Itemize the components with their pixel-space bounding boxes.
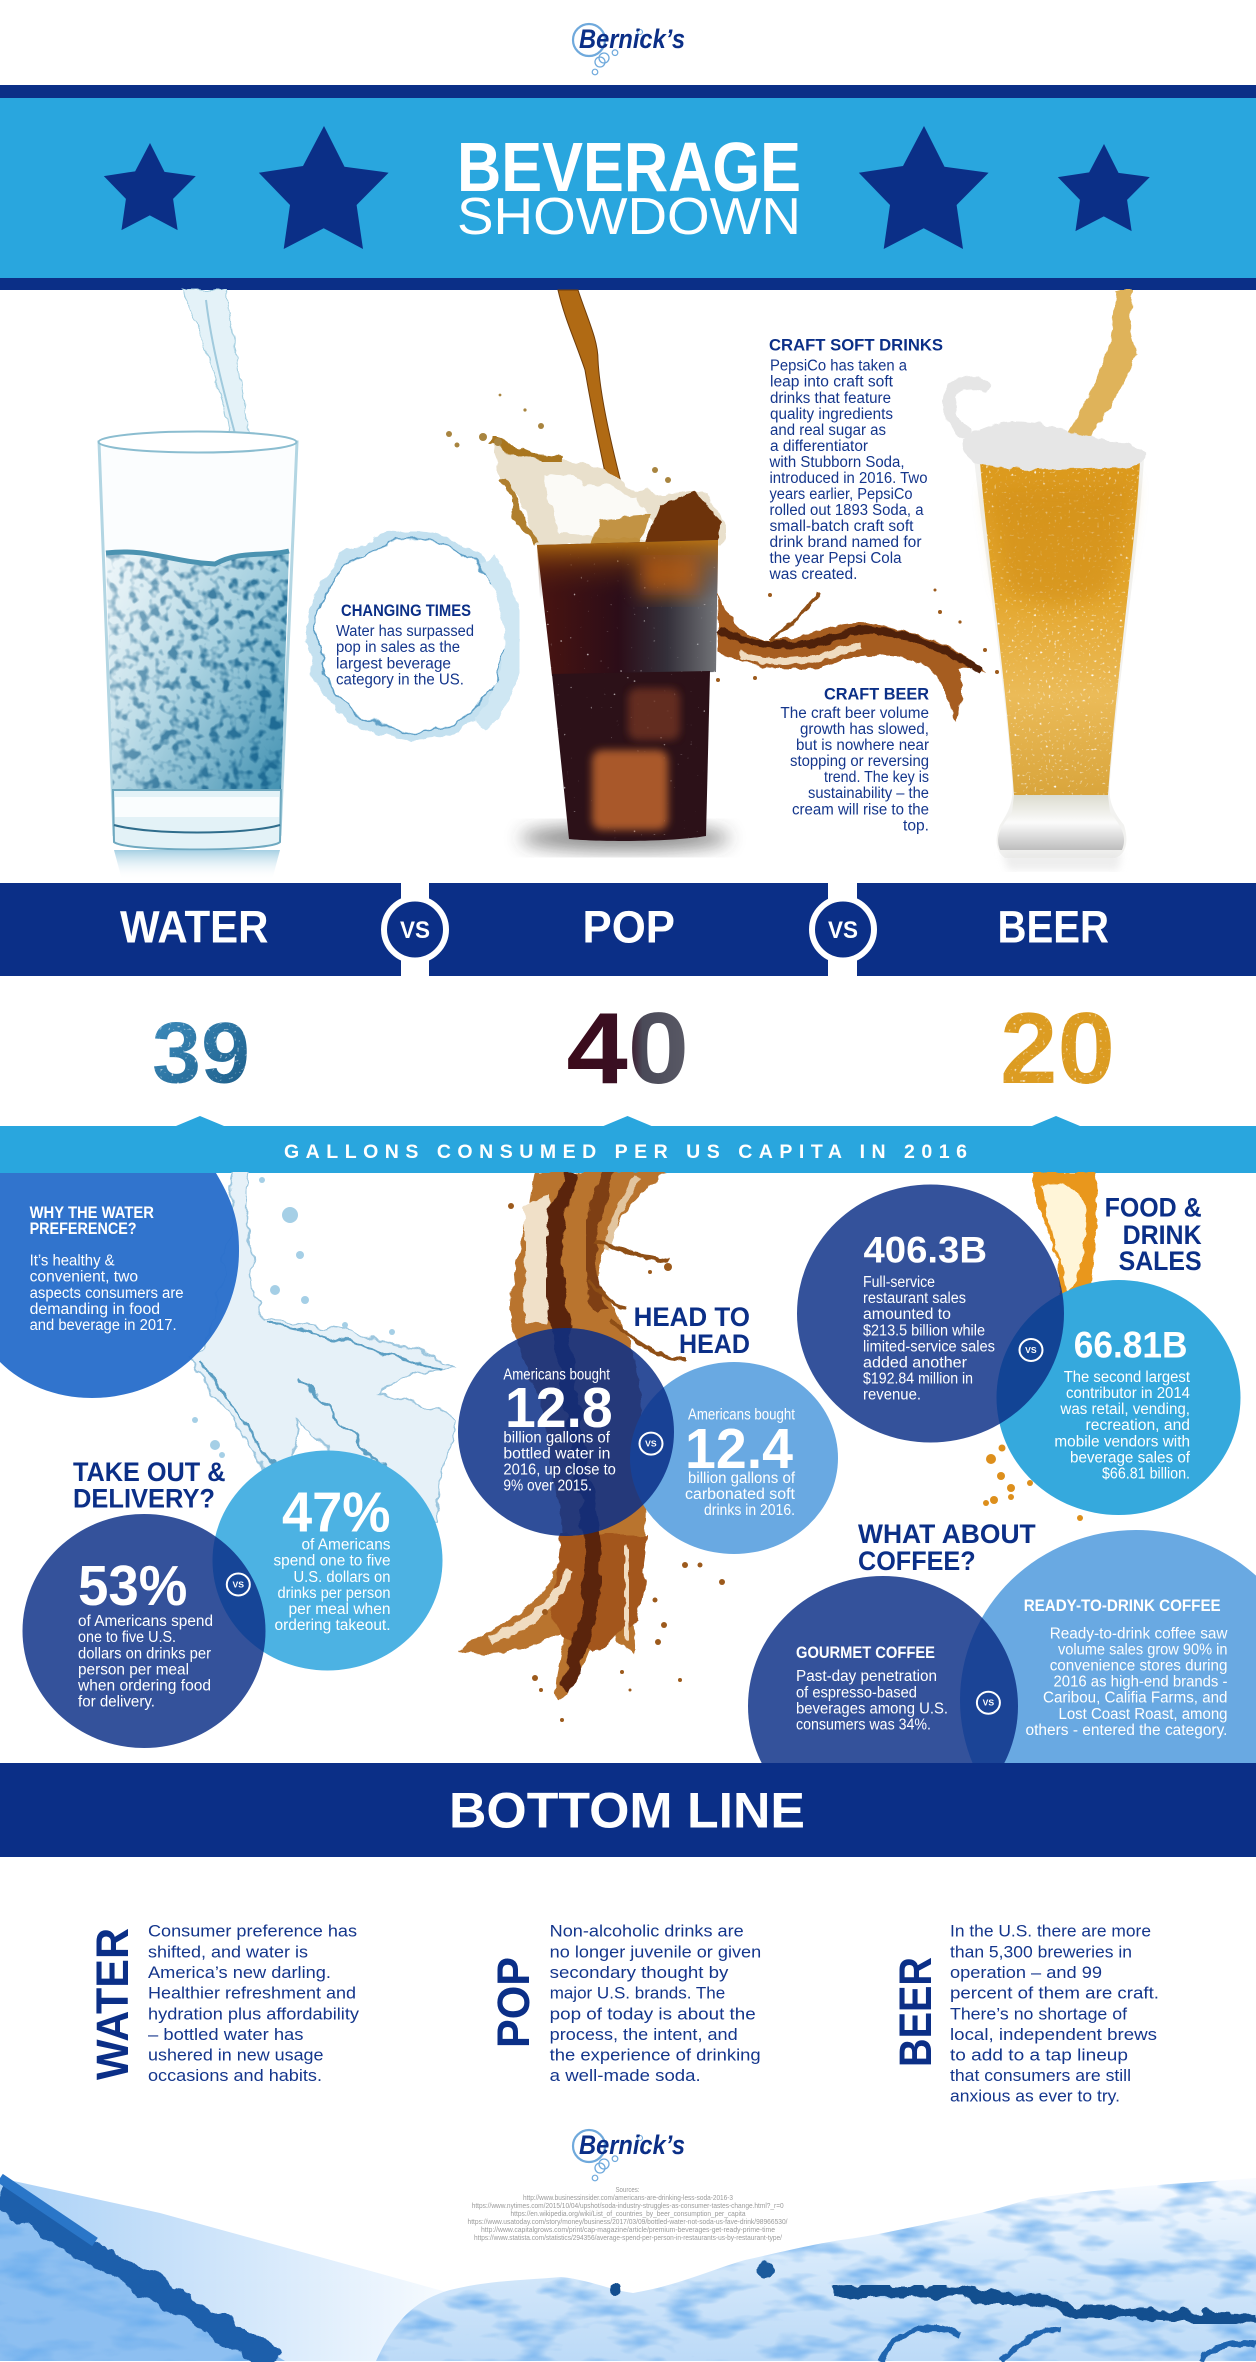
text block: craft beer: The craft beer volume	[780, 705, 929, 722]
band: bottom line: BOTTOM LINE	[449, 1782, 805, 1838]
column: pop bottom line: process, the intent, and	[550, 2025, 738, 2044]
icon: vs badge 2	[812, 898, 874, 960]
panel: 47 percent takeout: ordering takeout.	[274, 1617, 390, 1634]
panel: 66.81B retail: was retail, vending,	[1059, 1401, 1190, 1418]
icon: vs takeout	[227, 1574, 250, 1596]
panel: why the water preference: WHY THE WATER	[30, 1203, 154, 1222]
icon: vs head to head	[640, 1433, 662, 1455]
panel: 53 percent delivery: person per meal	[78, 1661, 189, 1678]
icon: vs badge 1	[384, 898, 446, 960]
icon: vs sales	[1020, 1339, 1042, 1361]
title: SHOWDOWN	[457, 188, 801, 246]
illustration: water ring splash	[312, 536, 513, 736]
text block: craft soft drinks: PepsiCo has taken a	[770, 358, 907, 375]
column: pop bottom line: Non-alcoholic drinks are	[550, 1922, 744, 1941]
panel: gourmet coffee: of espresso-based	[796, 1684, 917, 1701]
panel: 47 percent takeout: spend one to five	[274, 1553, 390, 1570]
column: pop bottom line: no longer juvenile or given	[550, 1942, 761, 1961]
panel: 12.4 billion gallons soft drinks: Americans bought	[688, 1406, 796, 1424]
column: pop bottom line: pop of today is about the	[550, 2004, 756, 2023]
panel: ready-to-drink coffee: Caribou, Califia Farms, and	[1043, 1690, 1228, 1707]
band: bottom line	[0, 1763, 1256, 1857]
column: pop bottom line: a well-made soda.	[550, 2066, 701, 2085]
column: beer bottom line: operation – and 99	[950, 1963, 1102, 1982]
text block: craft soft drinks: drinks that feature	[770, 390, 891, 407]
stat: 20 gallons beer: 20	[1000, 993, 1115, 1105]
column: beer bottom line: than 5,300 breweries in	[950, 1942, 1132, 1961]
panel: 53 percent delivery: of Americans spend	[78, 1613, 213, 1630]
panel: ready-to-drink coffee: Ready-to-drink coffee saw	[1050, 1625, 1228, 1642]
icon: vs head to head: VS	[645, 1439, 657, 1449]
column: water bottom line: Consumer preference has	[148, 1922, 357, 1941]
panel: 12.4 billion gallons soft drinks: billion gallons of	[688, 1470, 796, 1487]
panel: 53 percent delivery	[22, 1514, 266, 1748]
text block: sources: http://www.capitalgrows.com/print/cap-magazine/article/premium-beverages-get-ready-prime-time	[481, 2225, 775, 2234]
panel: why the water preference: demanding in food	[30, 1301, 160, 1318]
panel: pop label: POP	[582, 902, 675, 953]
panel: 53 percent delivery: for delivery.	[78, 1694, 155, 1710]
panel: why the water preference: It’s healthy &	[30, 1253, 115, 1270]
column: pop bottom line: secondary thought by	[550, 1963, 729, 1982]
panel: 66.81B retail: beverage sales of	[1070, 1449, 1191, 1466]
panel: ready-to-drink coffee: READY-TO-DRINK COFFEE	[1024, 1596, 1221, 1615]
panel: 406.3B restaurant sales: restaurant sales	[863, 1290, 966, 1307]
illustration: cola splash vertical	[460, 1172, 725, 1722]
column: water bottom line: America’s new darling.	[148, 1963, 331, 1982]
panel: why the water preference: convenient, two	[30, 1269, 138, 1286]
panel: 47 percent takeout: per meal when	[288, 1601, 390, 1618]
heading: head to head: HEAD	[679, 1329, 750, 1359]
text block: craft soft drinks: with Stubborn Soda,	[769, 454, 904, 471]
panel: 66.81B retail: mobile vendors with	[1054, 1433, 1190, 1450]
illustration: cola splash right	[716, 588, 999, 722]
panel: 406.3B restaurant sales: limited-service sales	[863, 1338, 995, 1355]
logo: Bernick's bottom	[573, 2130, 685, 2181]
text block: craft beer: trend. The key is	[824, 769, 929, 786]
panel: 12.4 billion gallons soft drinks	[630, 1362, 838, 1554]
panel: why the water preference: aspects consumers are	[30, 1285, 184, 1302]
text block: craft beer: but is nowhere near	[796, 737, 929, 754]
text block: craft beer: stopping or reversing	[790, 753, 929, 770]
logo: Bernick's top	[573, 24, 685, 75]
text block: craft soft drinks: was created.	[768, 566, 858, 583]
icon: vs coffee	[977, 1692, 1000, 1714]
panel: 47 percent takeout: 47%	[282, 1481, 390, 1545]
panel: 12.4 billion gallons soft drinks: drinks in 2016.	[704, 1502, 795, 1519]
panel: 12.8 billion gallons water: 9% over 2015.	[503, 1478, 592, 1495]
panel: ready-to-drink coffee: convenience stores during	[1050, 1658, 1228, 1675]
icon: star far right	[1058, 144, 1150, 231]
panel: 12.8 billion gallons water	[458, 1328, 674, 1536]
text block: craft soft drinks: CRAFT SOFT DRINKS	[769, 336, 943, 354]
heading: food and drink sales: DRINK	[1123, 1220, 1202, 1250]
text block: sources: Sources:	[616, 2185, 640, 2194]
panel: 406.3B restaurant sales: Full-service	[863, 1274, 935, 1291]
panel: 12.8 billion gallons water: Americans bought	[503, 1367, 611, 1384]
heading: food and drink sales: FOOD &	[1105, 1193, 1202, 1223]
text block: craft beer: CRAFT BEER	[824, 684, 929, 704]
column: water bottom line: – bottled water has	[148, 2025, 304, 2044]
panel: beer label	[857, 883, 1256, 976]
text block: craft soft drinks: leap into craft soft	[770, 374, 894, 391]
text block: craft soft drinks: drink brand named for	[770, 534, 922, 551]
heading: take out and delivery: DELIVERY?	[73, 1484, 215, 1514]
column: pop bottom line: the experience of drinking	[550, 2046, 761, 2065]
column: water bottom line	[87, 1922, 360, 2085]
title	[457, 128, 801, 246]
illustration: beer splash	[983, 1172, 1097, 1521]
panel: pop label	[429, 883, 828, 976]
icon: vs badge 2: VS	[828, 917, 858, 944]
callout: changing times: pop in sales as the	[336, 639, 460, 656]
column: pop bottom line: POP	[488, 1957, 539, 2048]
panel: 406.3B restaurant sales: revenue.	[863, 1387, 921, 1404]
panel: 406.3B restaurant sales: added another	[863, 1354, 967, 1372]
icon: star right	[859, 126, 989, 249]
text block: sources	[468, 2185, 788, 2242]
heading: head to head	[634, 1302, 750, 1359]
panel: 66.81B retail: $66.81 billion.	[1102, 1466, 1190, 1482]
text block: sources: https://www.usatoday.com/story/money/business/2017/03/09/bottled-water-not-soda-us-fave-drink/98966530/	[468, 2217, 788, 2226]
column: beer bottom line: There’s no shortage of	[950, 2004, 1127, 2023]
panel: 66.81B retail: The second largest	[1064, 1369, 1191, 1386]
panel: water label	[0, 883, 401, 976]
panel: 53 percent delivery: when ordering food	[77, 1678, 211, 1694]
panel: 47 percent takeout	[212, 1450, 442, 1670]
heading: what about coffee	[858, 1519, 1036, 1576]
panel: 66.81B retail	[996, 1280, 1240, 1515]
panel: gourmet coffee: consumers was 34%.	[796, 1716, 931, 1734]
text block: craft soft drinks: the year Pepsi Cola	[770, 550, 902, 567]
icon: vs badge 1: VS	[400, 917, 430, 944]
stat: 39 gallons water: 39	[152, 1006, 250, 1102]
panel: 406.3B restaurant sales: $213.5 billion while	[863, 1322, 985, 1339]
panel: 12.4 billion gallons soft drinks: 12.4	[685, 1417, 793, 1481]
text block: sources: https://www.nytimes.com/2015/10/04/upshot/soda-industry-struggles-as-consumer-tastes-change.html?_r=0	[472, 2201, 784, 2210]
panel: why the water preference: PREFERENCE?	[30, 1219, 137, 1238]
heading: food and drink sales: SALES	[1119, 1246, 1202, 1276]
text block: sources: https://www.statista.com/statistics/294356/average-spend-per-person-in-restaurants-us-by-restaurant-type/	[474, 2233, 783, 2242]
column: water bottom line: ushered in new usage	[148, 2046, 324, 2065]
panel: 47 percent takeout: of Americans	[302, 1537, 391, 1554]
panel: 47 percent takeout: drinks per person	[278, 1585, 390, 1602]
text block: craft beer: sustainability – the	[808, 785, 929, 802]
panel: 406.3B restaurant sales: amounted to	[863, 1306, 951, 1323]
column: pop bottom line	[488, 1922, 761, 2085]
callout: changing times: CHANGING TIMES	[341, 601, 471, 620]
text block: craft soft drinks	[768, 336, 943, 583]
panel: ready-to-drink coffee	[960, 1530, 1256, 1763]
panel: gourmet coffee: Past-day penetration	[796, 1668, 937, 1685]
column: beer bottom line: that consumers are still	[950, 2066, 1131, 2085]
panel: ready-to-drink coffee: Lost Coast Roast, among	[1058, 1706, 1228, 1723]
heading: head to head: HEAD TO	[634, 1302, 750, 1332]
heading: what about coffee: COFFEE?	[858, 1546, 976, 1576]
text block: craft beer: growth has slowed,	[800, 721, 929, 738]
column: water bottom line: shifted, and water is	[148, 1942, 308, 1961]
panel: 53 percent delivery: one to five U.S.	[78, 1629, 176, 1646]
panel: ready-to-drink coffee: 2016 as high-end brands -	[1054, 1674, 1228, 1691]
illustration: beer glass	[949, 290, 1146, 870]
column: beer bottom line: In the U.S. there are more	[950, 1922, 1151, 1941]
panel: 66.81B retail: recreation, and	[1086, 1417, 1190, 1434]
panel: 406.3B restaurant sales	[797, 1184, 1064, 1442]
column: pop bottom line: major U.S. brands. The	[550, 1984, 725, 2003]
illustration: water splash	[190, 1172, 456, 1520]
panel: 12.8 billion gallons water: 2016, up close to	[503, 1462, 616, 1479]
stat: 40 gallons pop: 40	[566, 993, 689, 1105]
text block: sources: https://en.wikipedia.org/wiki/List_of_countries_by_beer_consumption_per_capita	[510, 2209, 746, 2218]
panel: gourmet coffee: GOURMET COFFEE	[796, 1643, 935, 1662]
band: gallons consumed	[0, 1116, 1256, 1173]
text block: sources: http://www.businessinsider.com/americans-are-drinking-less-soda-2016-3	[523, 2193, 733, 2202]
logo: Bernick's top: Bernick’s	[579, 24, 685, 54]
header banner	[0, 85, 1256, 290]
column: water bottom line: hydration plus affordability	[148, 2004, 360, 2023]
column: water bottom line: WATER	[87, 1928, 138, 2080]
panel: 47 percent takeout: U.S. dollars on	[294, 1569, 390, 1586]
panel: gourmet coffee	[748, 1576, 1018, 1763]
panel: beer label: BEER	[998, 902, 1109, 953]
icon: vs coffee: VS	[983, 1698, 994, 1708]
panel: why the water preference	[0, 1173, 239, 1398]
callout: changing times	[336, 601, 474, 688]
text block: craft soft drinks: years earlier, PepsiCo	[770, 486, 912, 503]
panel: gourmet coffee: beverages among U.S.	[796, 1700, 948, 1717]
text block: craft beer: top.	[903, 817, 929, 834]
illustration: cola glass with splash	[446, 290, 730, 850]
heading: take out and delivery: TAKE OUT &	[73, 1457, 226, 1487]
panel: water label: WATER	[120, 902, 268, 953]
illustration: water glass	[98, 290, 297, 880]
band: gallons consumed: GALLONS CONSUMED PER US CAPITA IN 2016	[284, 1141, 967, 1163]
text block: craft soft drinks: small-batch craft soft	[770, 518, 914, 535]
logo: Bernick's bottom: Bernick’s	[579, 2130, 685, 2160]
text block: craft beer: cream will rise to the	[792, 801, 929, 818]
panel: 406.3B restaurant sales: $192.84 million in	[863, 1370, 973, 1388]
column: beer bottom line: anxious as ever to try.	[950, 2086, 1120, 2106]
panel: 53 percent delivery: dollars on drinks per	[78, 1645, 211, 1662]
heading: food and drink sales	[1105, 1193, 1202, 1276]
callout: changing times: Water has surpassed	[336, 623, 474, 640]
text block: craft beer	[780, 684, 929, 834]
icon: star left	[259, 126, 389, 249]
panel: 406.3B restaurant sales: 406.3B	[864, 1230, 987, 1271]
panel: 12.8 billion gallons water: bottled water in	[503, 1446, 610, 1463]
column: beer bottom line: percent of them are craft.	[950, 1984, 1159, 2003]
panel: 12.8 billion gallons water: billion gallons of	[503, 1430, 611, 1446]
column: beer bottom line	[890, 1922, 1159, 2106]
panel: ready-to-drink coffee: others - entered the category.	[1026, 1722, 1228, 1739]
panel: 12.8 billion gallons water: 12.8	[505, 1376, 613, 1440]
column: water bottom line: Healthier refreshment and	[148, 1984, 356, 2003]
column: beer bottom line: to add to a tap lineup	[950, 2046, 1128, 2065]
text block: craft soft drinks: introduced in 2016. Two	[770, 470, 928, 487]
panel: ready-to-drink coffee: volume sales grow 90% in	[1058, 1642, 1228, 1658]
text block: craft soft drinks: a differentiator	[770, 438, 868, 455]
callout: changing times: largest beverage	[336, 656, 451, 672]
text block: craft soft drinks: and real sugar as	[770, 422, 886, 439]
versus banner	[0, 883, 1256, 976]
text block: craft soft drinks: quality ingredients	[770, 406, 893, 423]
panel: 66.81B retail: contributor in 2014	[1066, 1385, 1190, 1402]
heading: take out and delivery	[73, 1457, 226, 1514]
icon: vs takeout: VS	[232, 1580, 244, 1590]
text block: craft soft drinks: rolled out 1893 Soda, a	[770, 502, 924, 519]
heading: what about coffee: WHAT ABOUT	[858, 1519, 1036, 1549]
title: BEVERAGE	[457, 128, 801, 206]
column: water bottom line: occasions and habits.	[148, 2066, 322, 2085]
illustration: water footer	[0, 2178, 1256, 2361]
panel: 66.81B retail: 66.81B	[1074, 1324, 1188, 1366]
panel: 53 percent delivery: 53%	[78, 1554, 187, 1618]
callout: changing times: category in the US.	[336, 672, 464, 688]
panel: why the water preference: and beverage in 2017.	[30, 1317, 177, 1334]
icon: vs sales: VS	[1025, 1345, 1037, 1355]
icon: star far left	[104, 143, 196, 230]
column: beer bottom line: BEER	[890, 1957, 941, 2067]
panel: 12.4 billion gallons soft drinks: carbonated soft	[685, 1486, 796, 1503]
column: beer bottom line: local, independent brews	[950, 2025, 1157, 2044]
